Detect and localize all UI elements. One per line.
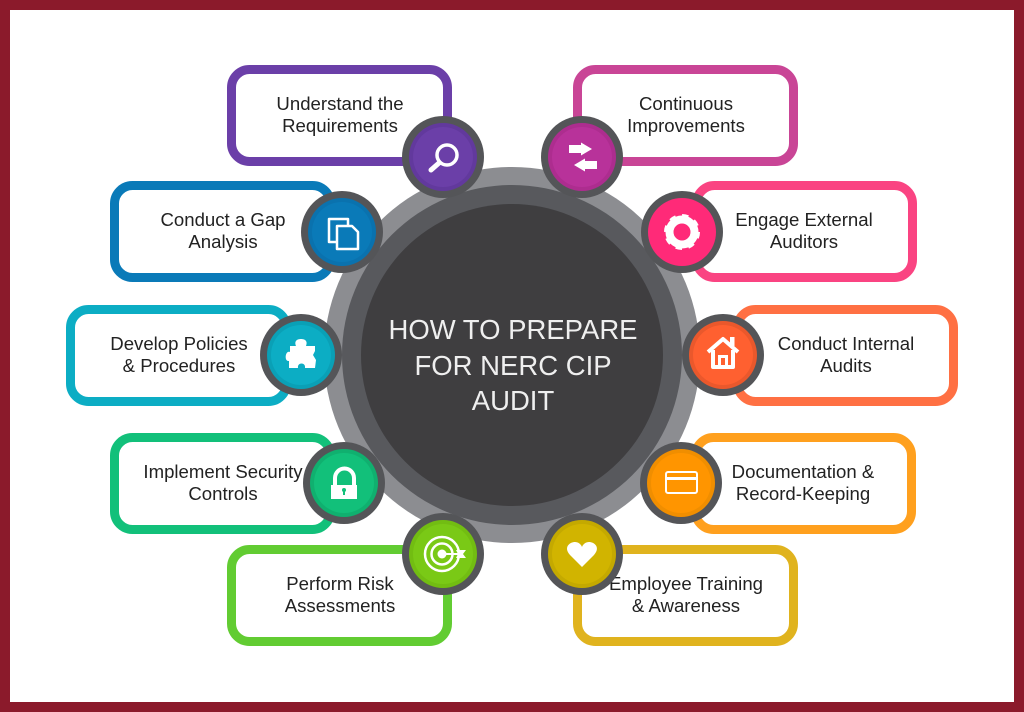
card: Continuous Improvements: Continuous (639, 93, 733, 114)
card: Documentation & Record-Keeping (696, 438, 912, 530)
central circle with title (324, 167, 700, 543)
card: Engage External Auditors: Engage External (735, 209, 873, 230)
card: Understand the Requirements: Requirements (282, 115, 398, 136)
icon: gear (641, 191, 723, 273)
icon: heart (541, 513, 623, 595)
title: HOW TO PREPARE (388, 314, 638, 345)
icon: puzzle piece (260, 314, 342, 396)
icon: documents (301, 191, 383, 273)
card: Continuous Improvements (578, 70, 794, 162)
card: Conduct a Gap Analysis: Analysis (188, 231, 258, 252)
card: Implement Security Controls (114, 438, 330, 530)
card: Conduct Internal Audits (738, 310, 954, 402)
card: Conduct a Gap Analysis (114, 186, 330, 278)
icon: house (682, 314, 764, 396)
title: FOR NERC CIP (414, 350, 612, 381)
card: Conduct Internal Audits: Audits (820, 355, 872, 376)
card: Documentation & Record-Keeping: Record-Keeping (736, 483, 870, 504)
card: Perform Risk Assessments: Perform Risk (286, 573, 394, 594)
card: Employee Training & Awareness (578, 550, 794, 642)
card: Perform Risk Assessments (232, 550, 448, 642)
icon: magnifier (402, 116, 484, 198)
card: Develop Policies & Procedures: & Procedures (123, 355, 235, 376)
icon: exchange arrows (541, 116, 623, 198)
card: Documentation & Record-Keeping: Documentation & (732, 461, 875, 482)
card: Conduct a Gap Analysis: Conduct a Gap (160, 209, 286, 230)
card: Engage External Auditors: Auditors (770, 231, 838, 252)
card: Perform Risk Assessments: Assessments (285, 595, 395, 616)
icon: card (640, 442, 722, 524)
card: Develop Policies & Procedures: Develop Policies (110, 333, 248, 354)
card: Develop Policies & Procedures (70, 310, 286, 402)
card: Engage External Auditors (696, 186, 912, 278)
icon: target (402, 513, 484, 595)
card: Continuous Improvements: Improvements (627, 115, 745, 136)
card: Employee Training & Awareness: Employee Training (609, 573, 763, 594)
card: Understand the Requirements: Understand the (276, 93, 404, 114)
title: AUDIT (472, 385, 554, 416)
card: Employee Training & Awareness: & Awareness (632, 595, 740, 616)
card: Conduct Internal Audits: Conduct Internal (778, 333, 914, 354)
card: Understand the Requirements (232, 70, 448, 162)
card: Implement Security Controls: Implement Security (143, 461, 303, 482)
card: Implement Security Controls: Controls (188, 483, 258, 504)
icon: padlock (303, 442, 385, 524)
